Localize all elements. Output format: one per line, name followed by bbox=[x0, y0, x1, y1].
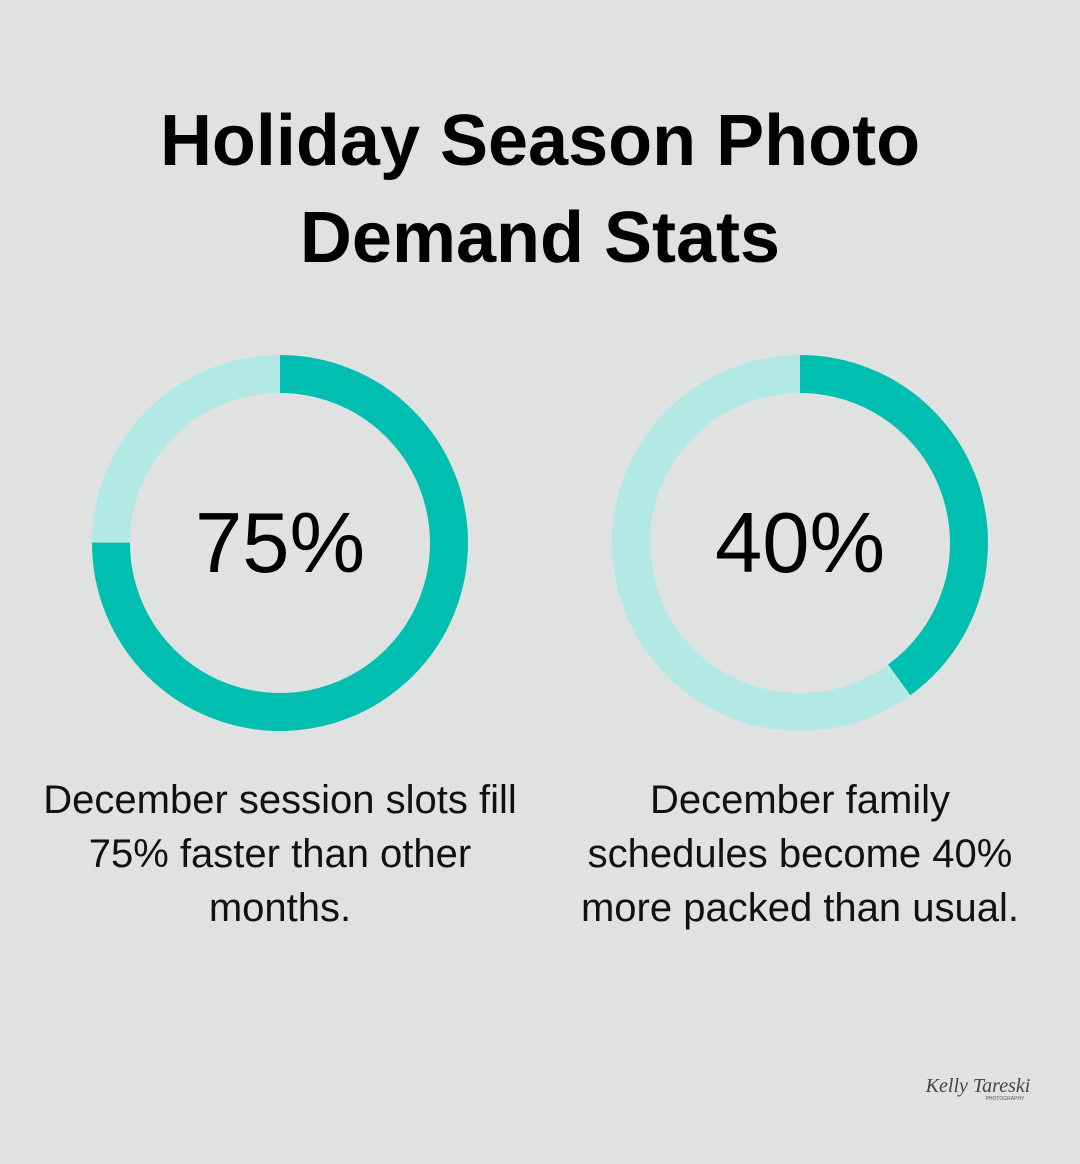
logo: PHOTOGRAPHY bbox=[986, 1096, 1025, 1102]
title bbox=[160, 101, 920, 278]
logo: Kelly Tareski bbox=[925, 1075, 1030, 1097]
donut: 75% bbox=[111, 374, 449, 712]
donut: 75%: 75% bbox=[195, 496, 365, 591]
title: Demand Stats bbox=[300, 198, 780, 278]
caption: 40%: more packed than usual. bbox=[581, 886, 1019, 930]
donut: 40%: 40% bbox=[715, 496, 885, 591]
caption: 75%: months. bbox=[209, 886, 351, 930]
caption: 75% bbox=[43, 778, 517, 930]
caption: 40%: December family bbox=[650, 778, 950, 822]
caption: 75%: December session slots fill bbox=[43, 778, 517, 822]
donut: 40% bbox=[631, 374, 969, 712]
caption: 75%: 75% faster than other bbox=[89, 832, 471, 876]
caption: 40%: schedules become 40% bbox=[588, 832, 1012, 876]
title: Holiday Season Photo bbox=[160, 101, 920, 181]
caption: 40% bbox=[581, 778, 1019, 930]
